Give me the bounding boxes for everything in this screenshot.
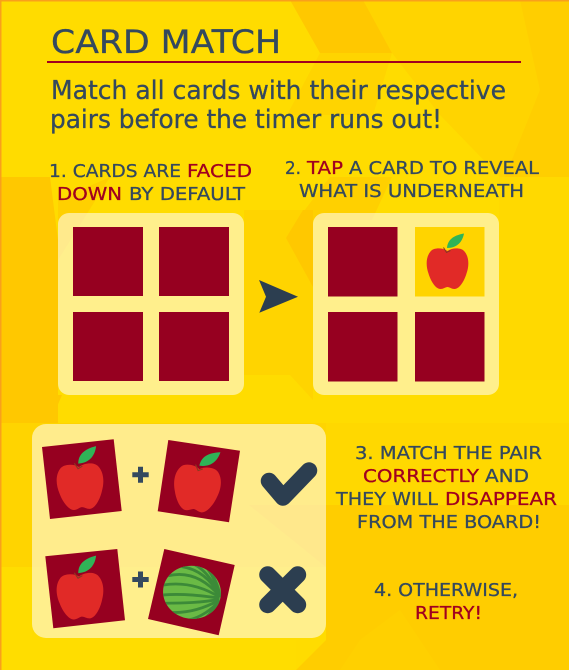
step 3 text: AND bbox=[485, 466, 529, 487]
step 2 text: TAP bbox=[306, 158, 343, 179]
step 2 text: 2. bbox=[285, 158, 301, 179]
subtitle: pairs before the timer runs out! bbox=[50, 105, 442, 135]
panel: one card revealed bbox=[313, 213, 499, 395]
plus sign bbox=[132, 467, 149, 483]
icon: apple bbox=[427, 234, 468, 289]
step 1 text: 1. CARDS ARE bbox=[49, 161, 181, 182]
step 3 text: THEY WILL bbox=[335, 489, 438, 510]
step 3 text: DISAPPEAR bbox=[445, 489, 557, 510]
icon: check mark bbox=[269, 470, 309, 498]
arrow bbox=[259, 280, 298, 313]
step 1 text: BY DEFAULT bbox=[129, 184, 246, 205]
step 2 text: A CARD TO REVEAL bbox=[349, 158, 539, 179]
step 4 text bbox=[374, 580, 518, 624]
panel: face-down cards bbox=[58, 213, 244, 395]
subtitle bbox=[50, 76, 506, 135]
panel: match examples bbox=[32, 424, 326, 638]
step 1 text: FACED bbox=[187, 161, 252, 182]
icon: watermelon bbox=[163, 566, 221, 619]
subtitle: Match all cards with their respective bbox=[51, 76, 506, 106]
step 2 text: WHAT IS UNDERNEATH bbox=[299, 181, 524, 202]
step 1 text: DOWN bbox=[57, 184, 122, 205]
step 3 text bbox=[335, 443, 557, 533]
step 3 text: CORRECTLY bbox=[363, 466, 480, 487]
step 3 text: FROM THE BOARD! bbox=[357, 512, 541, 533]
title underline bbox=[47, 61, 521, 63]
title: CARD MATCH bbox=[51, 23, 281, 61]
plus sign bbox=[132, 572, 149, 588]
card pair: apple and watermelon bbox=[45, 549, 235, 635]
step 4 text: RETRY! bbox=[415, 603, 482, 624]
step 3 text: 3. MATCH THE PAIR bbox=[355, 443, 542, 464]
step 4 text: 4. OTHERWISE, bbox=[374, 580, 518, 601]
icon: cross mark bbox=[268, 575, 298, 605]
step 2 text bbox=[285, 158, 539, 202]
card pair: matching apples bbox=[42, 439, 240, 522]
step 1 text bbox=[49, 161, 252, 205]
